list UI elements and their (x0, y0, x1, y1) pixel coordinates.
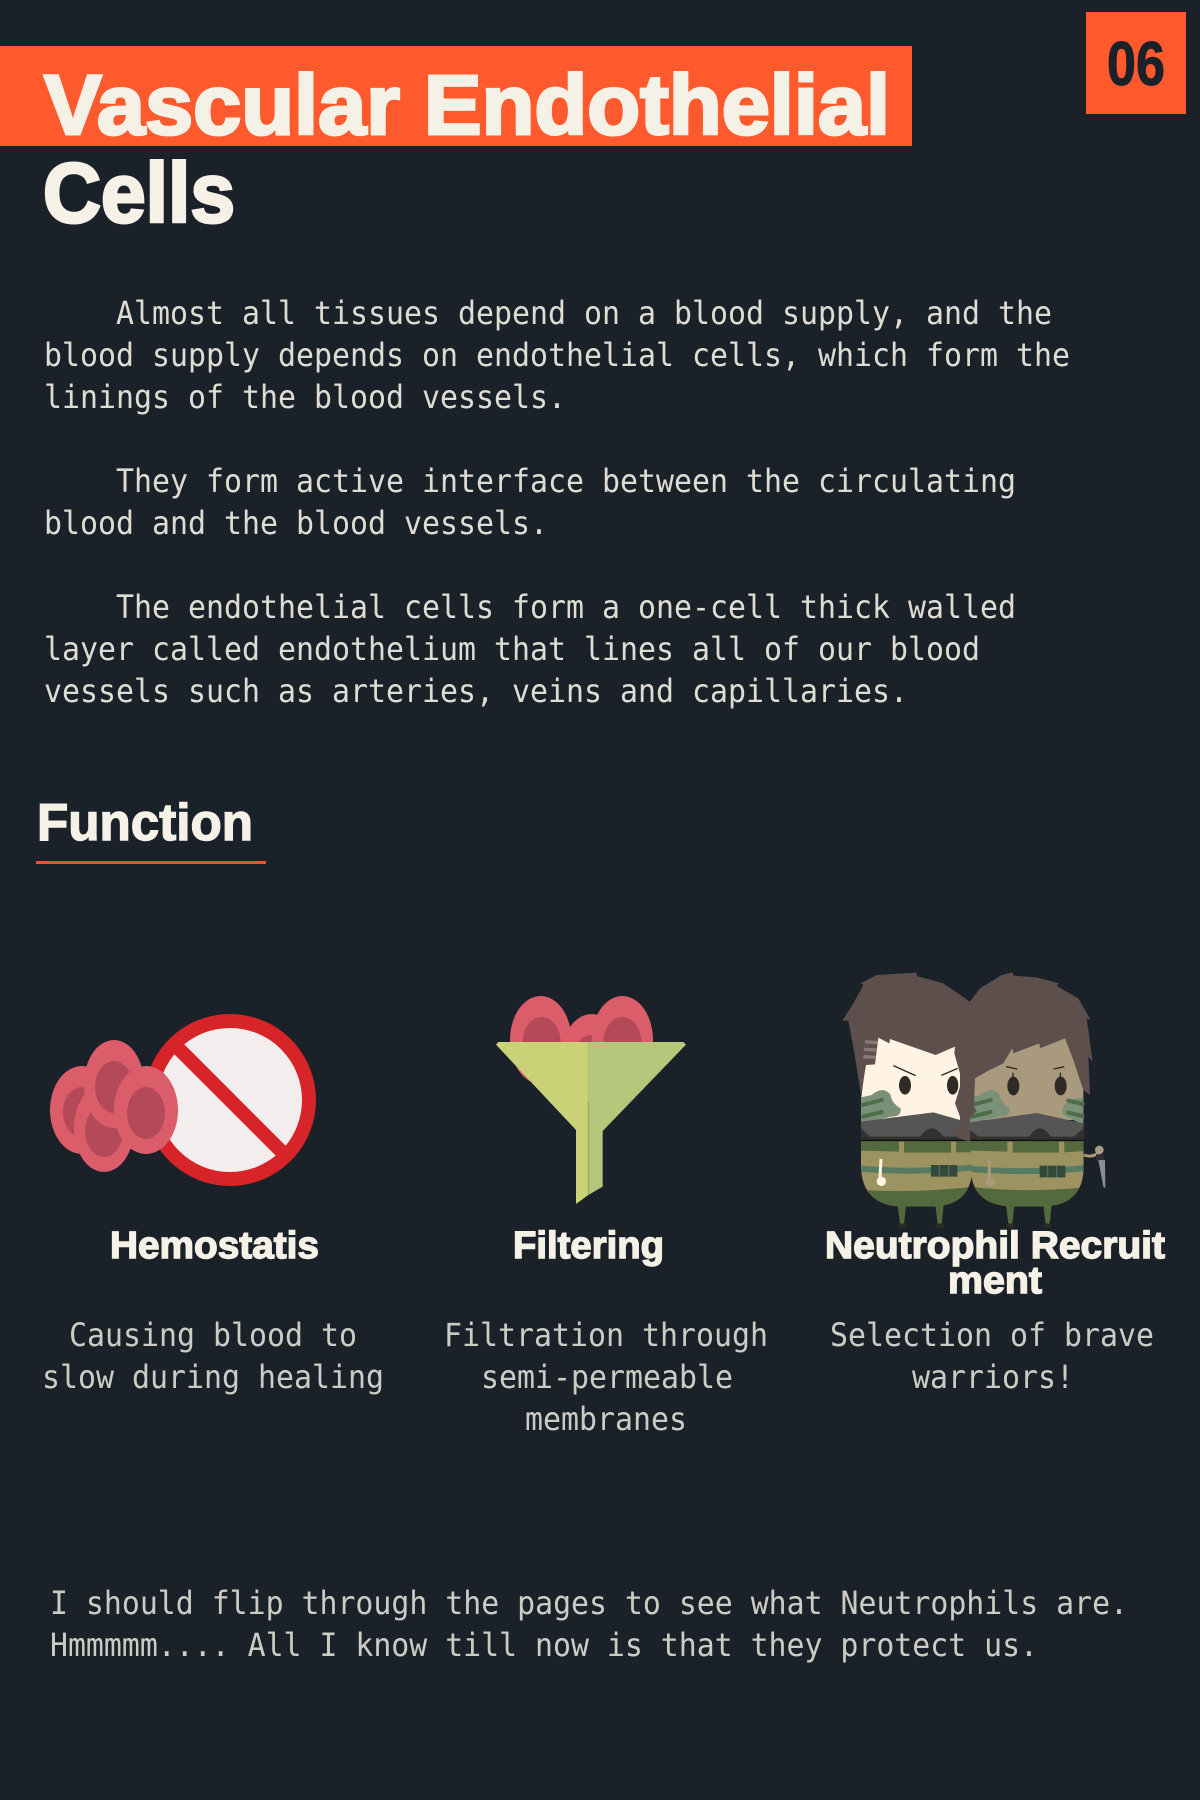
text: Hemostatis description: Causing blood to (69, 1316, 357, 1354)
footer note: I should flip through the pages to see what Neutrophils are. (50, 1584, 1128, 1622)
text: Hemostatis description: slow during healing (42, 1358, 384, 1396)
intro text block (44, 294, 1070, 710)
masks (861, 1112, 960, 1140)
intro text block: linings of the blood vessels. (44, 378, 566, 416)
pockets (931, 1165, 1065, 1177)
text: Filtering description (444, 1316, 768, 1438)
heading: Function: Function (37, 794, 253, 852)
text: Neutrophil description: Selection of brave (830, 1316, 1154, 1354)
bodies (860, 1140, 973, 1208)
hair clip (863, 1042, 877, 1057)
title banner (0, 46, 912, 146)
heading: Neutrophil Recruitment: ment (948, 1260, 1042, 1302)
intro text block: blood and the blood vessels. (44, 504, 548, 542)
eyes (899, 1076, 1067, 1095)
intro text block: blood supply depends on endothelial cells, which form the (44, 336, 1070, 374)
footer note: Hmmmmm.... All I know till now is that they protect us. (50, 1626, 1038, 1664)
icon: blocked blood cells (50, 1021, 309, 1179)
icon: neutrophil warriors (842, 972, 1105, 1228)
intro text block: They form active interface between the circulating (116, 462, 1016, 500)
text: Filtering description: Filtration through (444, 1316, 768, 1354)
faces (861, 1027, 971, 1120)
hair (842, 972, 1093, 1142)
intro text block: The endothelial cells form a one-cell thick walled (116, 588, 1016, 626)
legs and feet (897, 1205, 1052, 1228)
text: Filtering description: semi-permeable (481, 1358, 733, 1396)
heading: Filtering: Filtering (513, 1225, 664, 1267)
text: Neutrophil description: warriors! (912, 1358, 1074, 1396)
thermometers (880, 1159, 881, 1177)
intro text block: vessels such as arteries, veins and capillaries. (44, 672, 908, 710)
heading: Neutrophil Recruitment: Neutrophil Recruit (825, 1225, 1165, 1267)
text: Hemostatis description (42, 1316, 384, 1396)
hand and knife (1084, 1152, 1099, 1156)
title: Vascular Endothelial (44, 58, 890, 152)
icon: funnel with blood cells (496, 996, 686, 1204)
camouflage paint (861, 1090, 1083, 1125)
intro text block: Almost all tissues depend on a blood supply, and the (116, 294, 1052, 332)
title (43, 58, 890, 240)
brows (893, 1066, 1064, 1077)
page number badge (1086, 12, 1186, 114)
text: Filtering description: membranes (525, 1400, 687, 1438)
title: Cells (43, 146, 235, 240)
heading: Hemostatis: Hemostatis (110, 1225, 319, 1267)
text: Neutrophil description (830, 1316, 1154, 1396)
footer note (50, 1584, 1128, 1664)
page number badge: 06 (1107, 30, 1165, 99)
heading: Neutrophil Recruitment (825, 1225, 1165, 1302)
intro text block: layer called endothelium that lines all of our blood (44, 630, 980, 668)
